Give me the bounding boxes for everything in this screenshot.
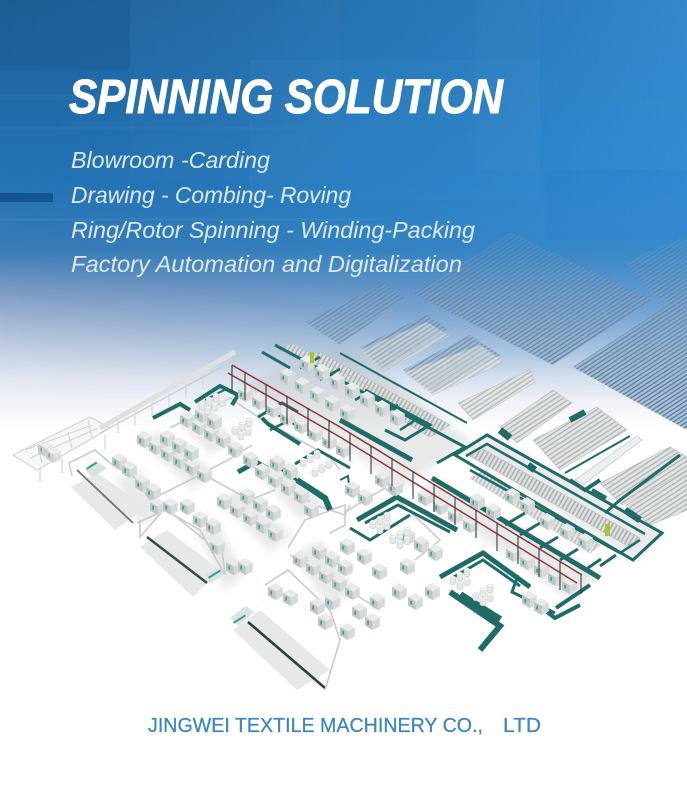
air ducts — [69, 398, 440, 690]
yarn can groups — [199, 393, 493, 606]
company name: JINGWEI TEXTILE MACHINERY CO., — [148, 714, 483, 737]
worker marker — [310, 352, 610, 536]
process list: Drawing - Combing- Roving — [71, 182, 351, 208]
far-background spinning frames — [305, 232, 687, 430]
pale blowroom pipe and platform — [13, 352, 240, 482]
grey spinning machine blocks — [280, 322, 687, 553]
background gradient — [0, 0, 687, 430]
process list: Ring/Rotor Spinning - Winding-Packing — [71, 217, 475, 243]
carding lines — [77, 462, 325, 688]
title: SPINNING SOLUTION — [69, 71, 504, 124]
machines under gantry — [238, 355, 577, 594]
company name: LTD — [503, 714, 541, 737]
teal conveyor belts — [153, 345, 680, 650]
process list: Factory Automation and Digitalization — [71, 251, 462, 277]
carding floor shadows — [71, 473, 330, 690]
factory layout illustration — [13, 322, 687, 690]
soft floor shadows — [115, 345, 665, 608]
process list — [71, 147, 475, 277]
process list: Blowroom -Carding — [71, 147, 270, 173]
blowroom machine — [38, 440, 61, 463]
machine clusters — [112, 406, 593, 640]
red overhead gantry — [228, 365, 582, 594]
